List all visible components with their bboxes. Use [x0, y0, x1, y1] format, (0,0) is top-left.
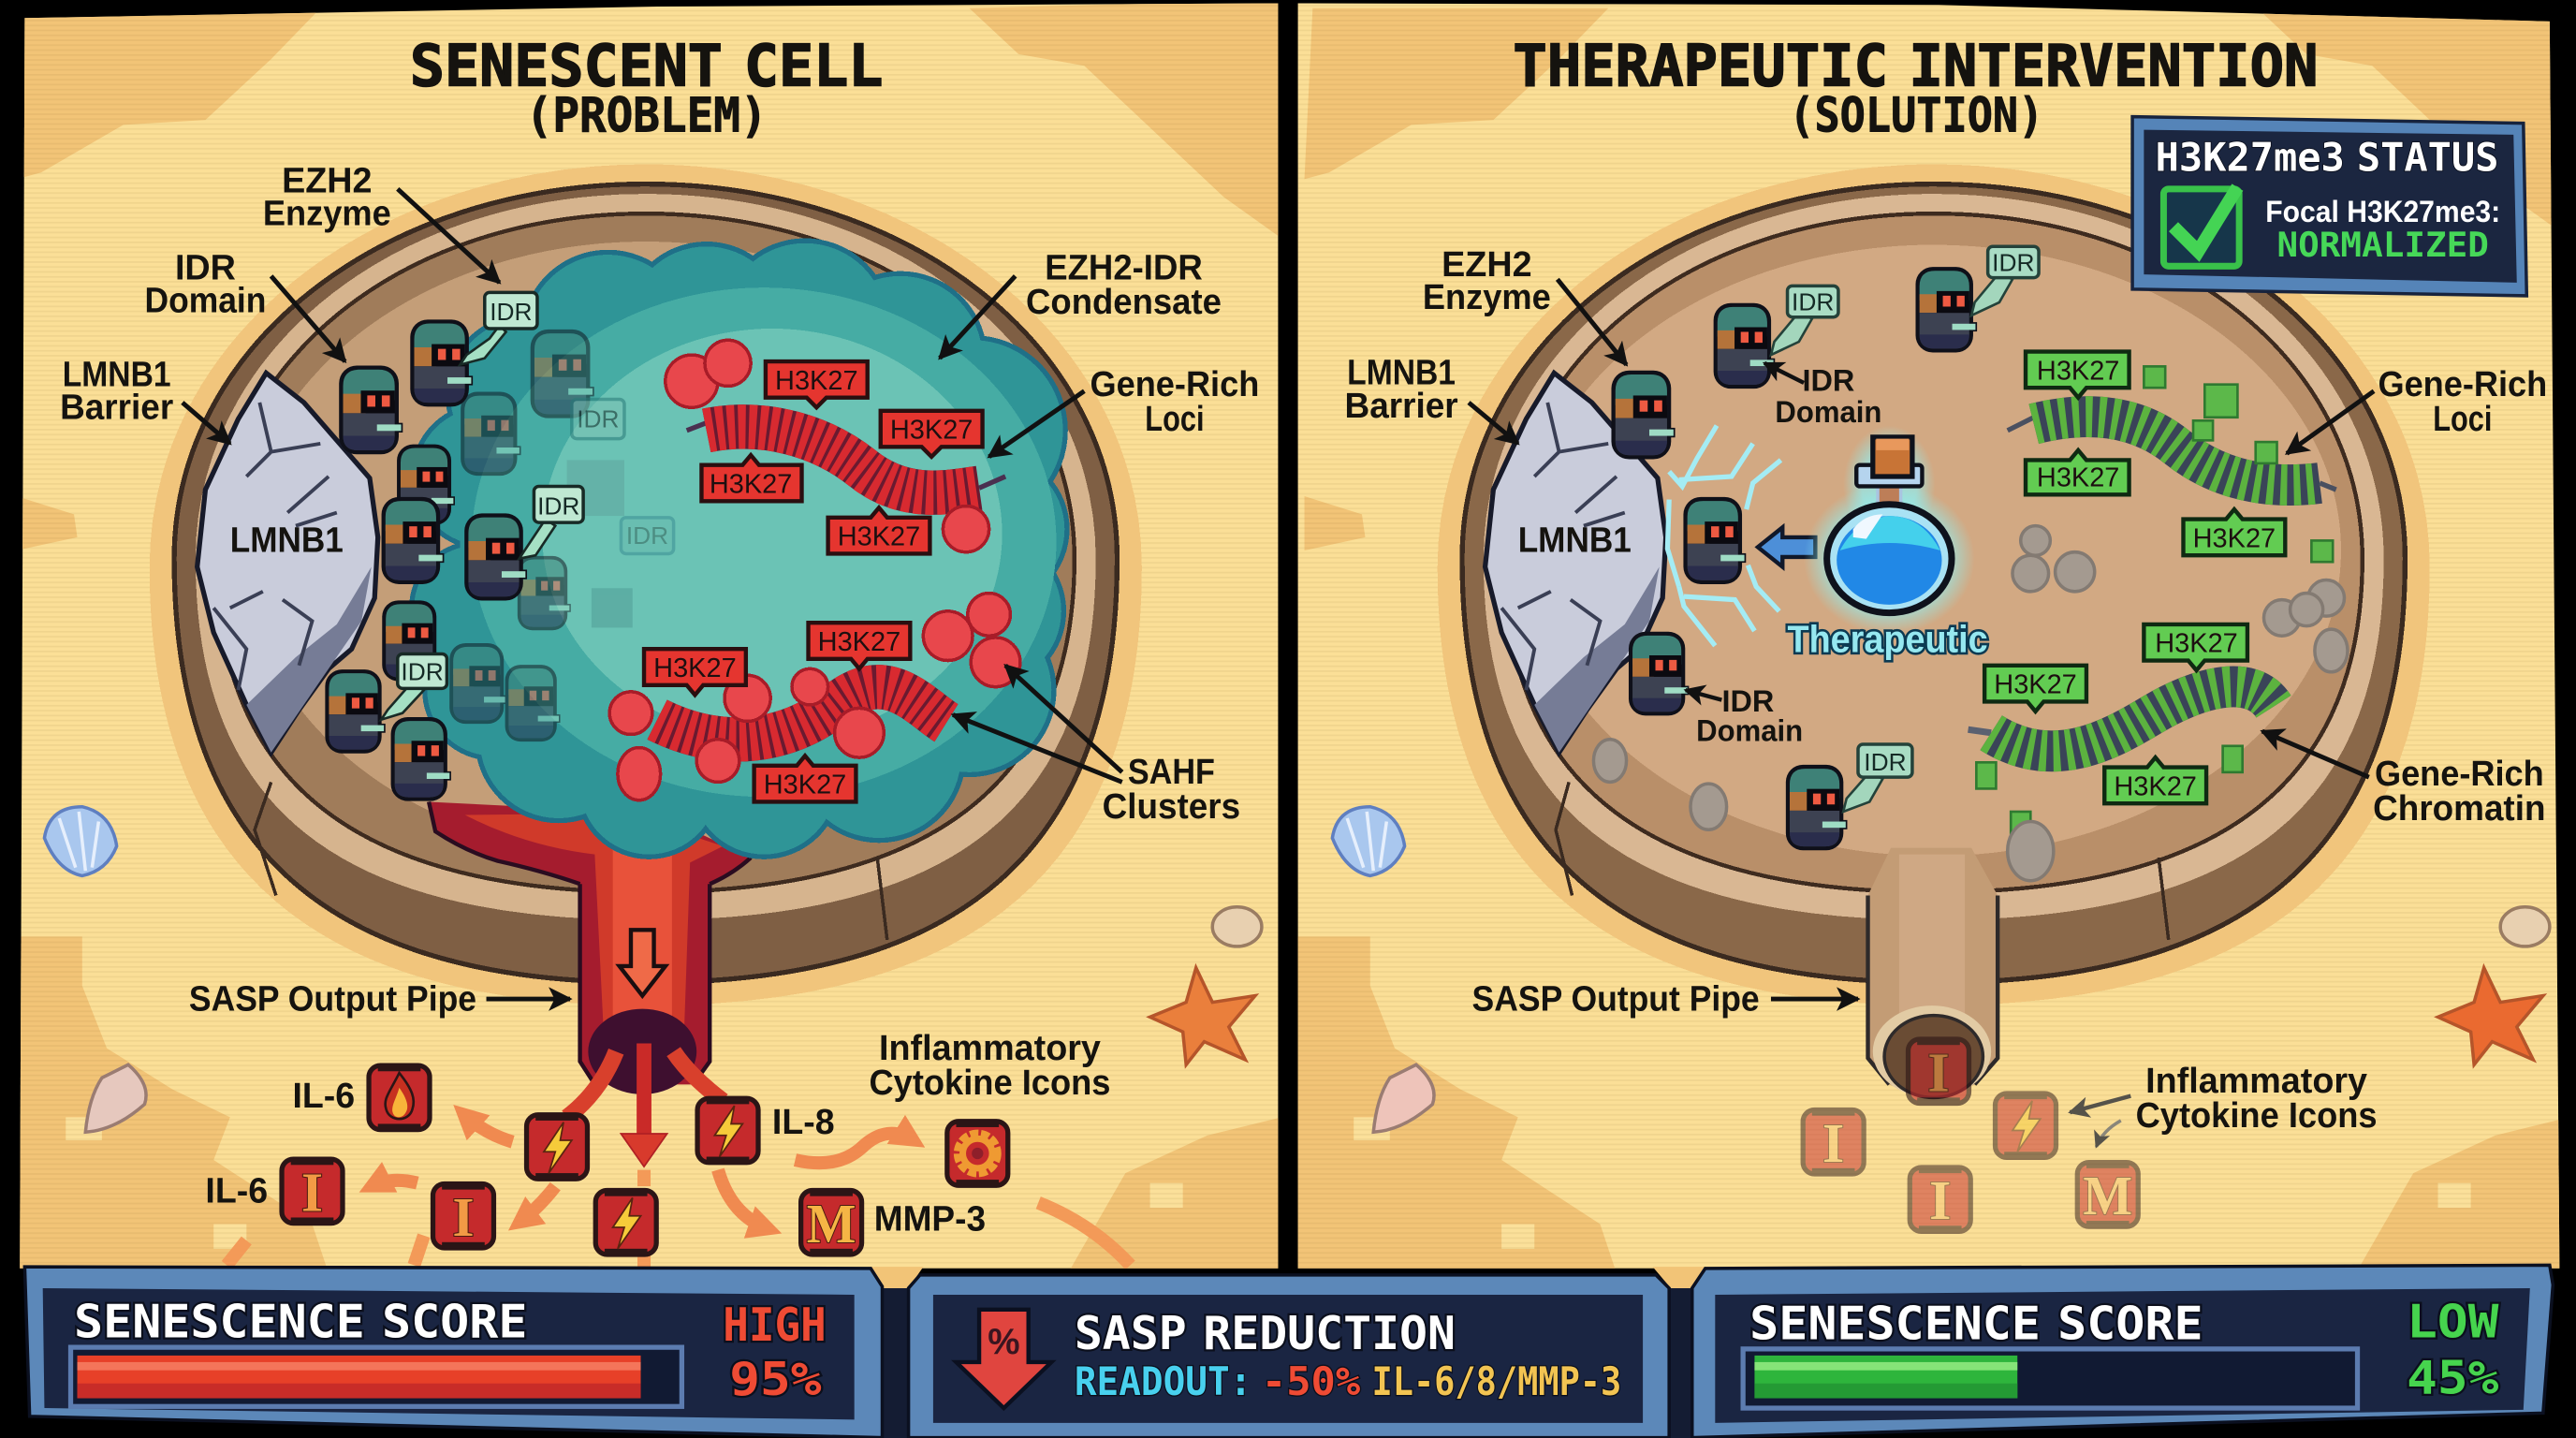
cytokine icon: bolt — [595, 1190, 656, 1255]
label: IDR Domain: IDR — [1721, 684, 1774, 718]
label: IDR Domain: Domain — [1696, 714, 1803, 748]
label: Gene-Rich Loci: Loci — [2433, 399, 2492, 438]
decoration: blue shell — [1332, 807, 1405, 875]
faded IDR bubble: IDR — [577, 404, 620, 433]
SASP arrow inside pipe — [620, 930, 666, 996]
arrow: IDR — [271, 276, 345, 361]
arrow: EZH2 — [398, 189, 500, 283]
H3K27 tag — [701, 455, 802, 501]
SAHF clusters — [609, 340, 1020, 800]
label: IDR Domain: Domain — [1775, 395, 1881, 429]
faded cytokine: M: M — [2083, 1165, 2132, 1226]
label: Gene-Rich Chromatin: Chromatin — [2373, 788, 2545, 828]
label: EZH2 Enzyme: Enzyme — [1423, 277, 1551, 316]
label: LMNB1 Barrier: Barrier — [1345, 386, 1458, 425]
cytokine icon: IL-6 I — [282, 1158, 343, 1224]
label: Inflammatory Cytokine Icons — [2136, 1061, 2378, 1135]
HUD meter: 95% — [71, 1347, 681, 1406]
arrow: SASP pipe — [487, 998, 570, 1000]
faded cytokine inside pipe — [1909, 1038, 1969, 1104]
label: Inflammatory Cytokine Icons: Inflammatory — [2145, 1061, 2367, 1100]
H3K27 tag: H3K27 — [890, 416, 973, 446]
H3K27 tag — [2104, 757, 2206, 803]
label: LMNB1 on rock: LMNB1 — [1518, 521, 1632, 560]
faded cytokine inside pipe: I — [1927, 1041, 1950, 1103]
status box: H3K27me3 — [2132, 117, 2526, 296]
vertical divider — [1278, 0, 1298, 1273]
arrow: gene-rich loci — [989, 391, 1084, 457]
label: IDR Domain: Domain — [145, 280, 266, 319]
label: Gene-Rich Chromatin — [2373, 754, 2545, 828]
faded enzymes inside condensate — [449, 330, 633, 741]
HUD value: 95% — [729, 1352, 822, 1406]
cytokine icon: I — [433, 1183, 493, 1249]
readout targets: IL-6/8/MMP-3 — [1372, 1358, 1621, 1404]
H3K27 tag: H3K27 — [838, 522, 920, 552]
arrow: IDR — [1686, 690, 1721, 700]
H3K27 tag: H3K27 — [2193, 523, 2276, 553]
IDR bubble: IDR — [537, 492, 579, 520]
chromatin: upper green fibre — [2008, 417, 2336, 490]
H3K27 tag — [2144, 624, 2247, 670]
decoration: pink shell — [1373, 1064, 1434, 1132]
HUD state: HIGH — [723, 1298, 827, 1352]
H3K27 tag — [881, 411, 983, 457]
gray debris — [1593, 526, 2348, 881]
label: Inflammatory Cytokine Icons: Inflammatory — [879, 1028, 1101, 1067]
label: LMNB1 Barrier — [1345, 353, 1458, 425]
H3K27 tag: H3K27 — [775, 366, 858, 396]
reduction arrow icon — [956, 1310, 1051, 1408]
green methylation cubes — [1976, 366, 2333, 836]
IDR bubble — [520, 486, 583, 559]
label: IDR Domain — [145, 247, 266, 319]
label: IL-8: IL-8 — [772, 1102, 835, 1141]
H3K27 tag — [2026, 450, 2130, 494]
label: Inflammatory Cytokine Icons — [869, 1028, 1110, 1102]
IDR bubble — [1971, 246, 2039, 315]
label: SASP Output Pipe: SASP Output Pipe — [189, 978, 476, 1018]
reduction heading: SASP REDUCTION — [1075, 1306, 1456, 1360]
arrows: SAHF — [953, 666, 1122, 782]
title: senescent cell: SENESCENT CELL — [410, 33, 883, 99]
readout value: -50% — [1262, 1358, 1361, 1404]
status value: NORMALIZED — [2277, 225, 2489, 265]
H3K27 tag: H3K27 — [2037, 356, 2119, 386]
decoration: small shell — [2500, 907, 2550, 946]
cytokine icon: gear — [947, 1121, 1008, 1186]
chromatin: lower red fibre — [657, 687, 946, 740]
label: SASP Output Pipe: SASP Output Pipe — [1472, 978, 1760, 1018]
decoration: blue shell — [44, 807, 117, 875]
HUD: SASP reduction — [909, 1275, 1669, 1438]
status heading: H3K27me3 STATUS — [2156, 135, 2498, 181]
H3K27 tag: H3K27 — [2114, 771, 2197, 801]
H3K27 tag: H3K27 — [818, 627, 900, 657]
faded IDR bubble — [572, 399, 624, 439]
HUD state: LOW — [2407, 1295, 2499, 1349]
SASP pipe: tan — [1868, 848, 1998, 1097]
label: LMNB1 on rock: LMNB1 — [230, 521, 344, 560]
label: EZH2 Enzyme: EZH2 — [1442, 244, 1532, 284]
IDR bubble — [1843, 744, 1912, 812]
label: Gene-Rich Loci: Gene-Rich — [1090, 364, 1259, 404]
decoration: starfish — [1150, 968, 1255, 1064]
label: EZH2 Enzyme — [1423, 244, 1551, 316]
label: Gene-Rich Loci — [2378, 364, 2547, 438]
H3K27 tag: H3K27 — [1994, 670, 2077, 700]
arrow: SASP pipe — [1771, 998, 1858, 1000]
label: Gene-Rich Chromatin: Gene-Rich — [2375, 754, 2544, 793]
chromatin: upper red fibre — [687, 419, 1005, 492]
HUD gutter backing — [868, 1267, 1708, 1438]
label: Inflammatory Cytokine Icons: Cytokine Icons — [2136, 1095, 2378, 1135]
panel: therapeutic intervention (solution) — [1288, 0, 2576, 1282]
label: SAHF Clusters: SAHF — [1128, 752, 1215, 791]
title: senescent cell — [410, 33, 883, 143]
label: IL-6: IL-6 — [292, 1076, 355, 1115]
label: IDR Domain — [1696, 684, 1803, 748]
H3K27 tag — [766, 361, 868, 407]
HUD heading: SENESCENCE SCORE — [1749, 1296, 2203, 1350]
label: EZH2 Enzyme: Enzyme — [263, 193, 391, 232]
SASP streams: red arrows and orange flows — [227, 1043, 1131, 1269]
IDR bubble: IDR — [490, 298, 533, 326]
therapeutic lightning — [1667, 426, 1781, 646]
label: LMNB1 Barrier: LMNB1 — [63, 354, 171, 393]
arrow: condensate — [940, 276, 1016, 359]
EZH2-IDR condensate — [414, 243, 1064, 855]
status text: Focal H3K27me3: — [2265, 195, 2500, 228]
arrow: gene-rich loci — [2287, 391, 2374, 453]
H3K27 tag — [754, 756, 856, 801]
SASP pipe: red — [429, 801, 751, 1094]
H3K27 tag: H3K27 — [764, 770, 846, 800]
label: Gene-Rich Loci: Gene-Rich — [2378, 364, 2547, 404]
status checkbox icon — [2163, 187, 2239, 266]
H3K27 tag — [2026, 352, 2130, 398]
HUD meter: 45% — [1743, 1349, 2358, 1408]
H3K27 tag — [644, 649, 746, 695]
label: SAHF Clusters: Clusters — [1103, 786, 1240, 826]
decoration: starfish — [2438, 968, 2543, 1064]
H3K27 tag — [2183, 509, 2285, 555]
decoration: pink shell — [85, 1064, 146, 1132]
label: IDR Domain: IDR — [1802, 364, 1854, 398]
faded cytokine: I: I — [1822, 1112, 1844, 1174]
H3K27 tag — [809, 623, 910, 668]
faded cytokine: I: I — [1929, 1169, 1951, 1231]
therapeutic label: Therapeutic — [1788, 618, 1988, 661]
faded IDR bubble — [621, 518, 674, 553]
label: MMP-3: MMP-3 — [874, 1199, 986, 1239]
title: therapeutic intervention: (SOLUTION) — [1789, 88, 2043, 143]
readout label: READOUT: — [1075, 1358, 1251, 1404]
title: therapeutic intervention: THERAPEUTIC INTERVENTION — [1513, 33, 2318, 99]
H3K27 tag — [828, 507, 929, 553]
faded cytokine: I — [1803, 1109, 1864, 1175]
IDR bubble: IDR — [401, 658, 444, 686]
arrow: EZH2 — [1558, 279, 1627, 365]
IDR bubble — [460, 292, 537, 365]
arrow: gene-rich chromatin — [2262, 731, 2369, 777]
label: Gene-Rich Loci: Loci — [1145, 399, 1204, 438]
IDR bubble: IDR — [1992, 249, 2035, 277]
HUD value: 45% — [2407, 1350, 2499, 1404]
cytokine icon: IL-8 bolt — [697, 1097, 758, 1164]
cytokine icon: MMP-3 M: M — [807, 1193, 856, 1255]
therapeutic potion — [1804, 426, 1975, 634]
cytokine icon: I: I — [452, 1186, 475, 1248]
faded cytokine: bolt — [1996, 1093, 2056, 1158]
faded IDR bubble: IDR — [626, 521, 668, 550]
label: IDR Domain — [1775, 364, 1881, 429]
IDR bubble — [381, 654, 446, 720]
label: EZH2-IDR Condensate — [1026, 247, 1222, 321]
HUD heading: SENESCENCE SCORE — [74, 1295, 527, 1349]
cytokine icon: IL-6 I: I — [301, 1161, 323, 1223]
label: SAHF Clusters — [1103, 752, 1240, 826]
H3K27 tag: H3K27 — [653, 653, 737, 683]
HUD: senescence score high — [24, 1267, 883, 1438]
H3K27 tag — [1984, 666, 2086, 712]
cell ring: solution — [1438, 165, 2430, 1005]
panel: senescent cell (problem) — [0, 0, 1298, 1282]
faded cytokine: I — [1910, 1167, 1970, 1232]
LMNB1 barrier rock — [1486, 373, 1666, 753]
label: IL-6: IL-6 — [205, 1171, 268, 1211]
enzymes at barrier — [325, 319, 527, 801]
cytokine icon: bolt — [527, 1114, 587, 1180]
label: EZH2 Enzyme: EZH2 — [282, 160, 373, 199]
H3K27 tag: H3K27 — [2037, 462, 2119, 492]
IDR bubble — [1771, 286, 1838, 355]
cytokine icon: IL-6 flame — [369, 1064, 430, 1130]
label: IDR Domain: IDR — [175, 247, 236, 286]
arrows: faded cytokines — [2070, 1096, 2130, 1147]
enzymes: solution — [1611, 267, 1977, 850]
cell ring: problem — [150, 165, 1142, 1005]
H3K27 tag: H3K27 — [710, 470, 792, 500]
label: LMNB1 Barrier — [60, 354, 174, 427]
label: EZH2 Enzyme — [263, 160, 391, 232]
arrow: LMNB1 — [183, 403, 230, 444]
label: Inflammatory Cytokine Icons: Cytokine Icons — [869, 1063, 1110, 1102]
label: LMNB1 Barrier: Barrier — [60, 388, 174, 427]
title: senescent cell: (PROBLEM) — [526, 88, 768, 143]
decoration: small shell — [1212, 907, 1262, 946]
label: Gene-Rich Loci — [1090, 364, 1259, 438]
HUD: senescence score low — [1692, 1265, 2553, 1438]
arrow: LMNB1 — [1469, 403, 1518, 444]
arrow: IDR — [1764, 363, 1804, 383]
IDR bubble: IDR — [1792, 288, 1834, 316]
label: EZH2-IDR Condensate: EZH2-IDR — [1045, 247, 1203, 286]
potion arrow — [1758, 527, 1815, 566]
LMNB1 barrier rock — [198, 373, 378, 753]
chromatin: lower green fibre — [1969, 686, 2274, 751]
label: EZH2-IDR Condensate: Condensate — [1026, 282, 1222, 321]
H3K27 tag: H3K27 — [2155, 629, 2238, 659]
IDR bubble: IDR — [1864, 748, 1907, 776]
title: therapeutic intervention — [1513, 33, 2318, 143]
reduction arrow icon: % — [988, 1322, 1020, 1362]
label: LMNB1 Barrier: LMNB1 — [1347, 353, 1456, 392]
